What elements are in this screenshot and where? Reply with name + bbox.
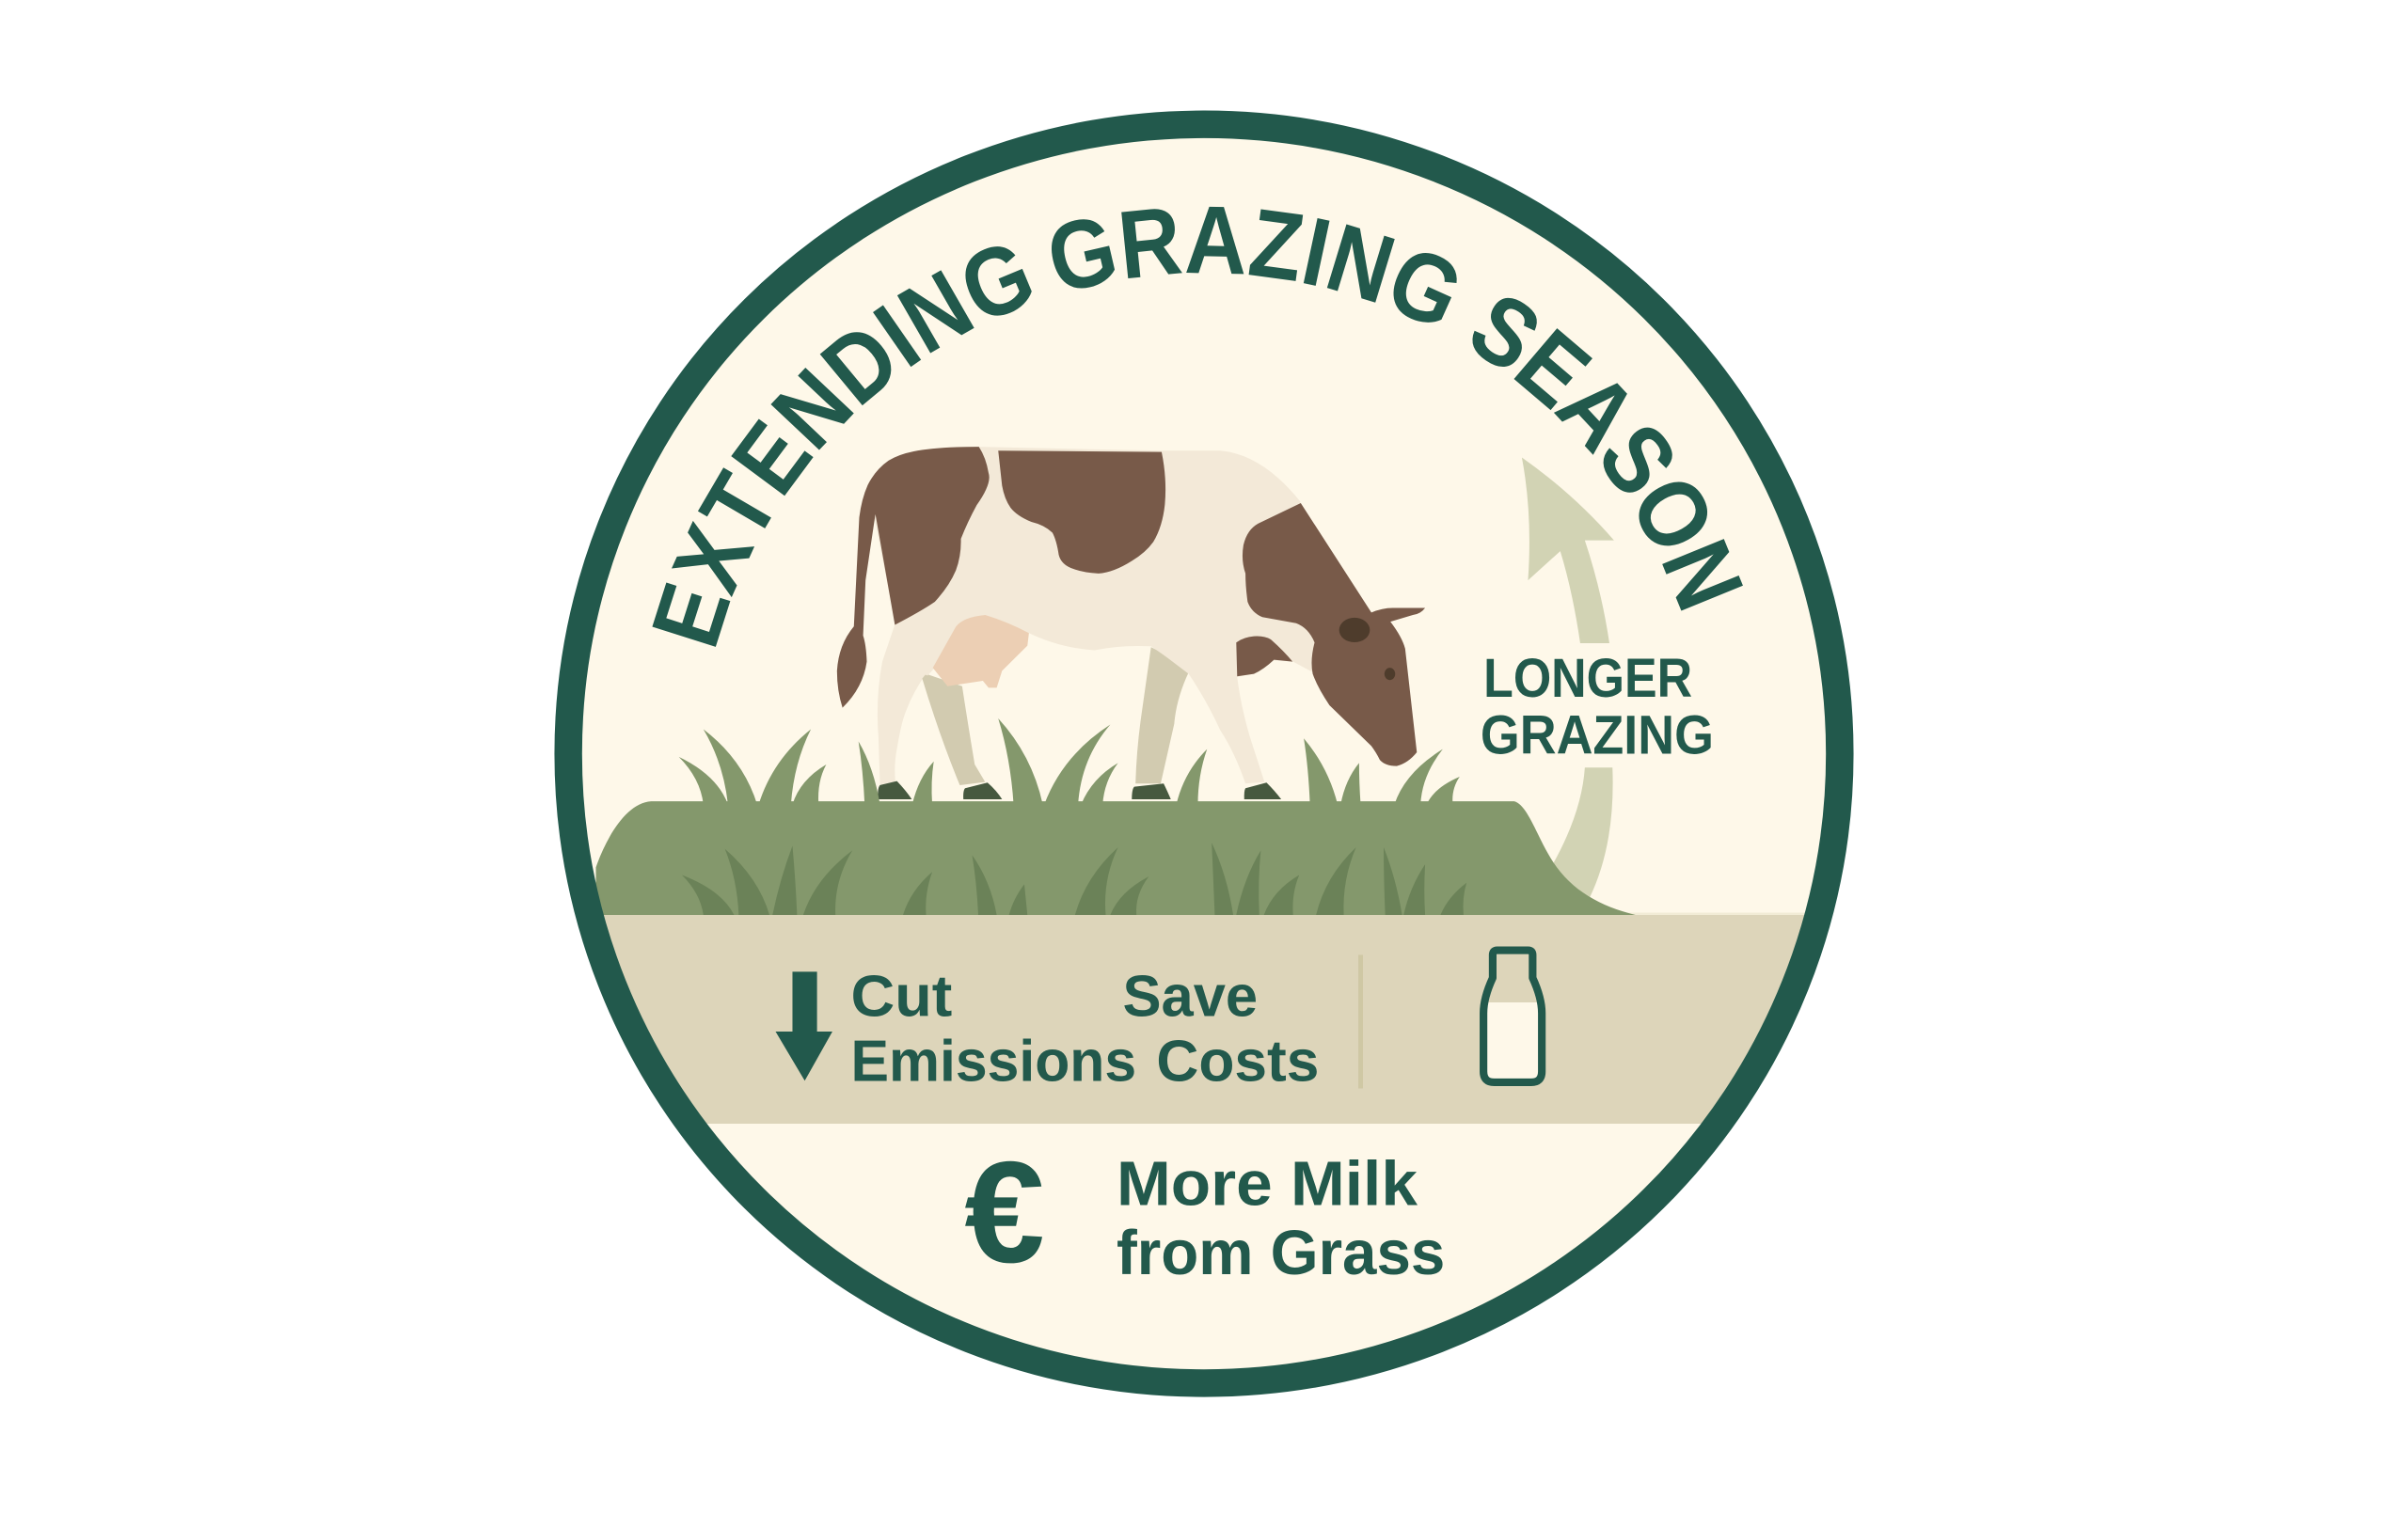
title: curved: X <box>652 510 774 607</box>
cow back patch <box>998 450 1165 574</box>
cow nostril <box>1385 668 1395 680</box>
cow eye <box>1339 618 1370 642</box>
cow rump patch and tail <box>837 447 990 708</box>
label: more milk from grass: from Grass <box>1117 1218 1445 1288</box>
title: curved: A <box>1537 352 1658 471</box>
grass blades <box>679 718 1460 804</box>
divider <box>1358 954 1363 1088</box>
label: cut emissions <box>851 965 1136 1094</box>
label: save costs: Costs <box>1156 1029 1319 1094</box>
title: curved: S <box>1577 404 1699 514</box>
info band <box>553 913 1858 1124</box>
label: cut emissions: Cut <box>851 965 952 1030</box>
label: cut emissions: Emissions <box>851 1029 1136 1094</box>
title: curved: A <box>1183 185 1248 295</box>
label: more milk from grass: More Milk <box>1117 1149 1418 1220</box>
title: curved: Z <box>1244 187 1310 302</box>
cow body <box>869 447 1321 677</box>
badge background <box>568 124 1840 1383</box>
cow <box>837 447 1425 799</box>
label: more milk from grass <box>1117 1149 1445 1288</box>
title: curved: I <box>1293 197 1339 307</box>
label: longer grazing <box>1481 648 1714 766</box>
title: curved: I <box>856 285 938 387</box>
title: curved: G <box>1372 224 1478 351</box>
label: longer grazing: GRAZING <box>1481 705 1714 766</box>
arrow: longer grazing <box>1522 457 1614 898</box>
title: curved: S <box>1451 271 1560 393</box>
title: curved: N <box>881 249 990 374</box>
title: curved: E <box>630 572 752 658</box>
title: curved: D <box>802 302 919 425</box>
badge infographic <box>554 111 1854 1397</box>
title: curved: E <box>1496 308 1610 428</box>
dark grass blades <box>682 843 1466 915</box>
title: curved: N <box>1316 202 1406 324</box>
cow head and neck <box>1243 503 1425 766</box>
label: save costs <box>1122 965 1319 1094</box>
title: curved: G <box>945 218 1049 344</box>
title: curved: G <box>1038 194 1127 314</box>
outer ring <box>568 124 1840 1383</box>
grass hill <box>596 718 1636 922</box>
cow ear <box>1236 637 1292 676</box>
cow hooves <box>878 781 1281 799</box>
title: curved: R <box>1114 185 1186 300</box>
cow legs <box>878 623 1264 785</box>
cow udder <box>933 615 1029 687</box>
title: curved <box>630 185 1765 658</box>
label: longer grazing: LONGER <box>1483 648 1692 709</box>
icon: milk bottle <box>1483 951 1542 1082</box>
icon: euro: € <box>964 1131 1045 1293</box>
icon: down arrow <box>776 971 832 1080</box>
title: curved: O <box>1609 458 1736 570</box>
title: curved: N <box>1640 526 1765 624</box>
label: save costs: Save <box>1122 965 1258 1030</box>
title: curved: E <box>711 402 832 512</box>
title: curved: N <box>752 349 873 468</box>
title: curved: T <box>679 456 800 556</box>
